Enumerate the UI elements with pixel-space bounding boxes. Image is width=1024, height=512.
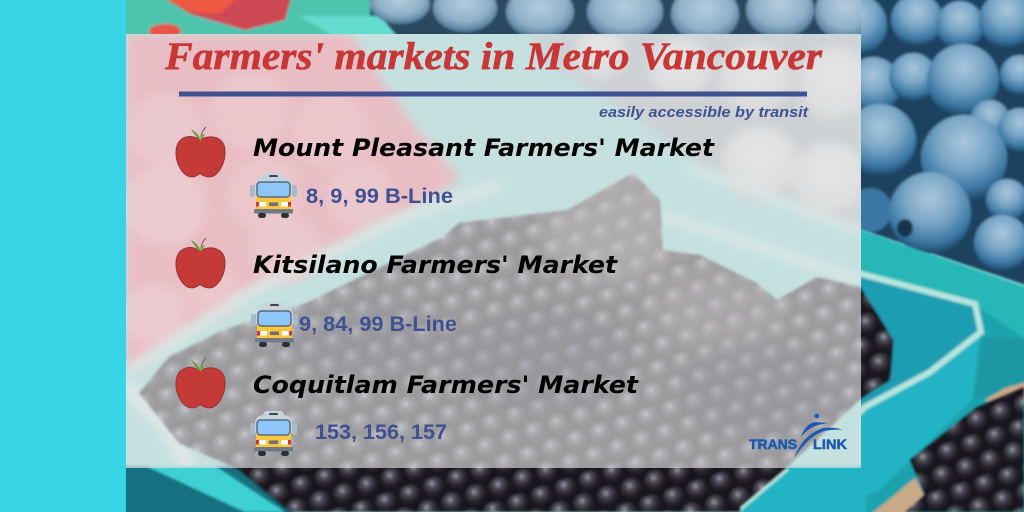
market name: Coquitlam Farmers' Market (253, 371, 640, 399)
market name: Kitsilano Farmers' Market (253, 251, 619, 279)
icon: apple (176, 358, 225, 408)
icon: bus (250, 411, 297, 456)
title: Farmers' markets in Metro Vancouver (164, 35, 823, 78)
bus routes: 9, 84, 99 B-Line (299, 313, 457, 336)
icon: bus (250, 173, 297, 218)
raspberries on the left (125, 34, 460, 372)
blackberries in the centre (126, 165, 900, 512)
icon: apple (176, 127, 225, 177)
right teal basket (861, 228, 1024, 512)
logo: TransLink: TRANS (749, 436, 797, 452)
subtitle: easily accessible by transit (599, 104, 809, 121)
market 3: Coquitlam (176, 358, 640, 456)
logo: TransLink: LINK (813, 436, 847, 452)
logo: TransLink (749, 414, 847, 458)
top strip: strawberries and blueberries (126, 0, 861, 34)
bottom left teal basket (120, 466, 298, 512)
blueberries at the top right (861, 0, 1024, 286)
bus routes: 8, 9, 99 B-Line (306, 185, 453, 208)
market 2: Kitsilano (176, 238, 619, 347)
title rule (179, 92, 807, 96)
icon: bus (251, 302, 298, 347)
icon: apple (176, 238, 225, 288)
bus routes: 153, 156, 157 (315, 421, 447, 444)
market name: Mount Pleasant Farmers' Market (253, 134, 716, 162)
left cyan strip (0, 0, 126, 512)
market 1: Mount Pleasant (176, 127, 716, 218)
translucent panel (126, 34, 861, 468)
pale blueberries and basket rim behind the panel (126, 29, 873, 470)
blackberries at the lower right (905, 387, 1024, 512)
wooden basket edge (862, 478, 925, 512)
bottom basket band under the panel edge (732, 466, 866, 512)
